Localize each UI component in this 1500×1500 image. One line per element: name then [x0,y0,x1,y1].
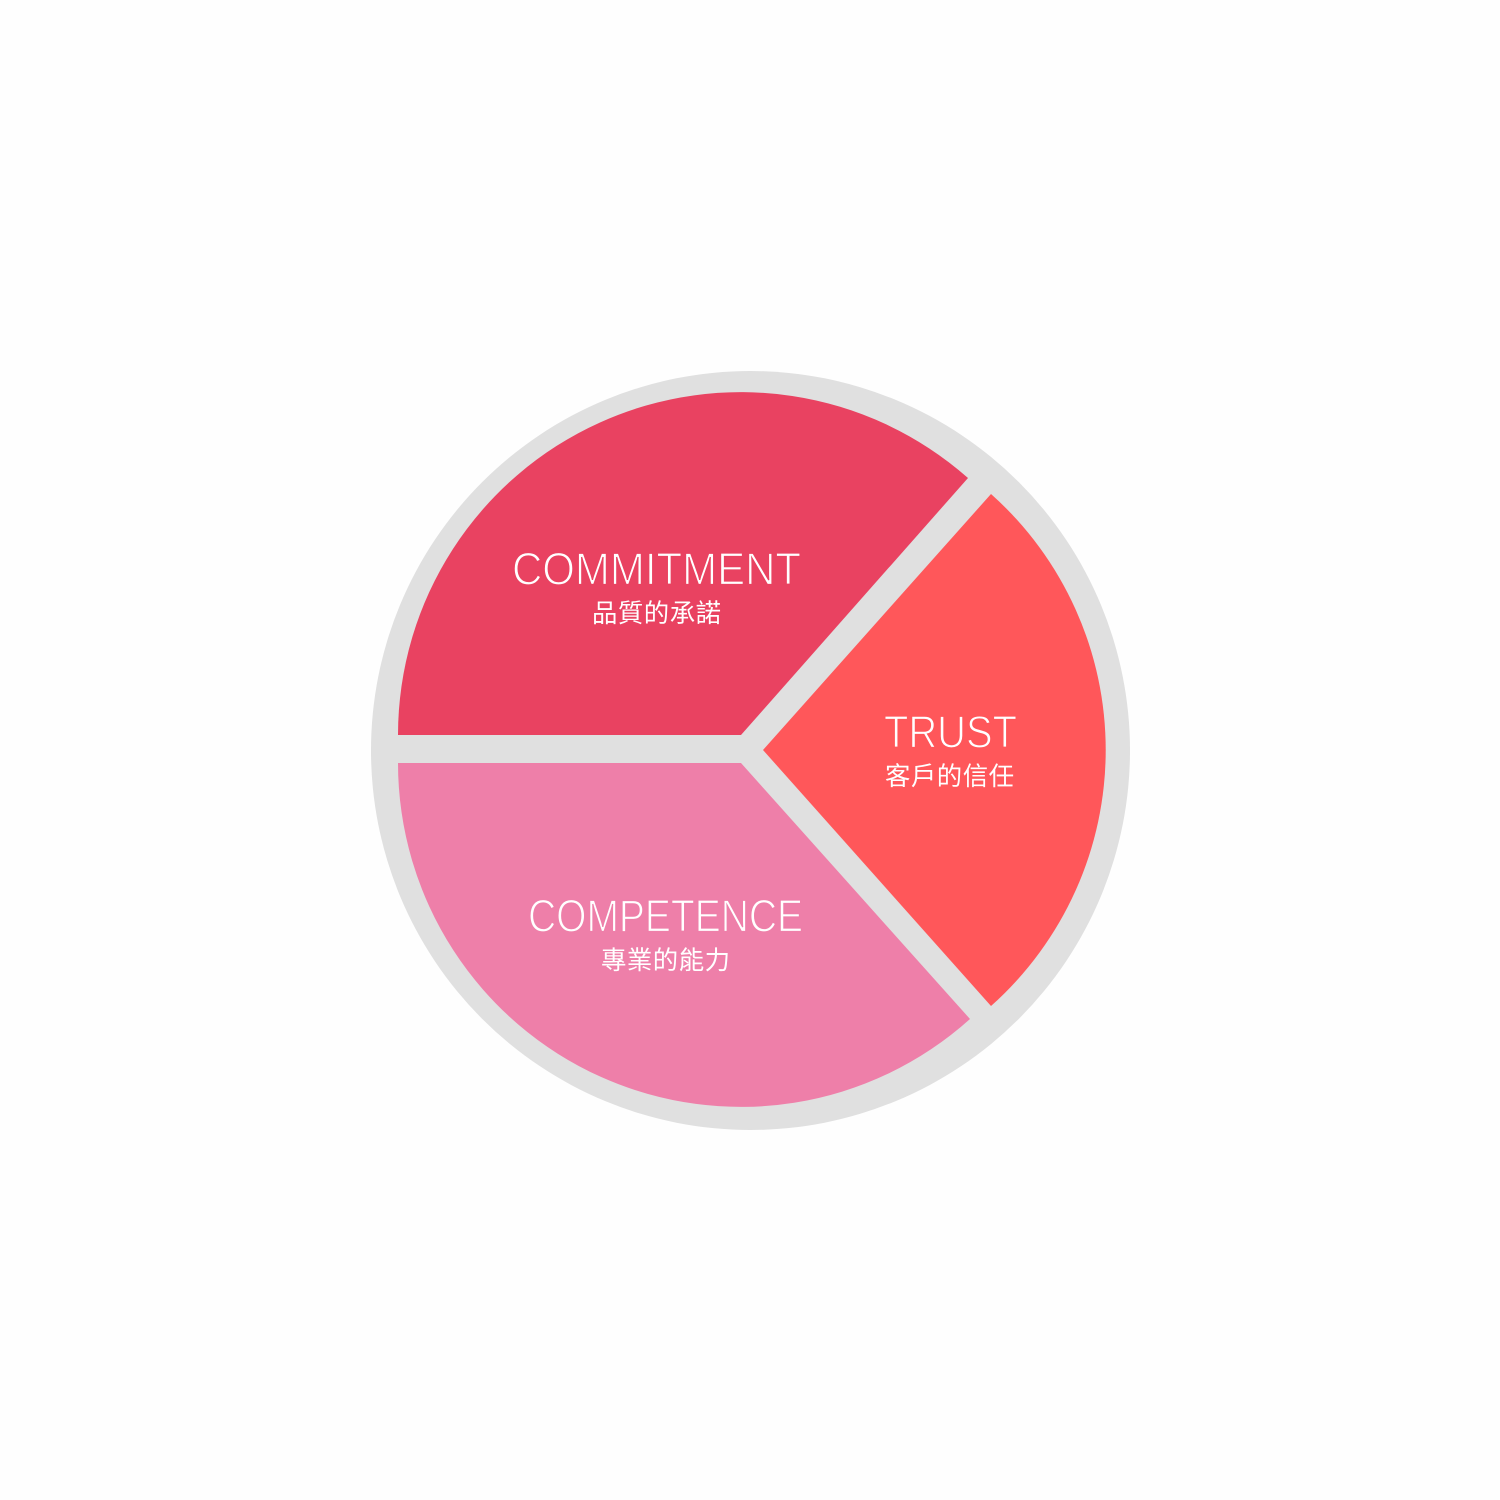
label: 專業的能力: 專業的能力 [601,947,730,975]
label: COMMITMENT: COMMITMENT [512,544,801,594]
segment: commitment [398,392,968,735]
label: 客戶的信任: 客戶的信任 [885,763,1014,791]
segment: trust [763,494,1106,1006]
label: TRUST: TRUST [884,706,1017,758]
wedge: trust [763,494,1106,1006]
label: 品質的承諾: 品質的承諾 [592,600,721,628]
wedge: competence [398,763,970,1107]
segment: competence [398,763,970,1107]
outer grey disc [371,371,1130,1130]
label: COMPETENCE: COMPETENCE [528,890,803,942]
wedge: commitment [398,392,968,735]
